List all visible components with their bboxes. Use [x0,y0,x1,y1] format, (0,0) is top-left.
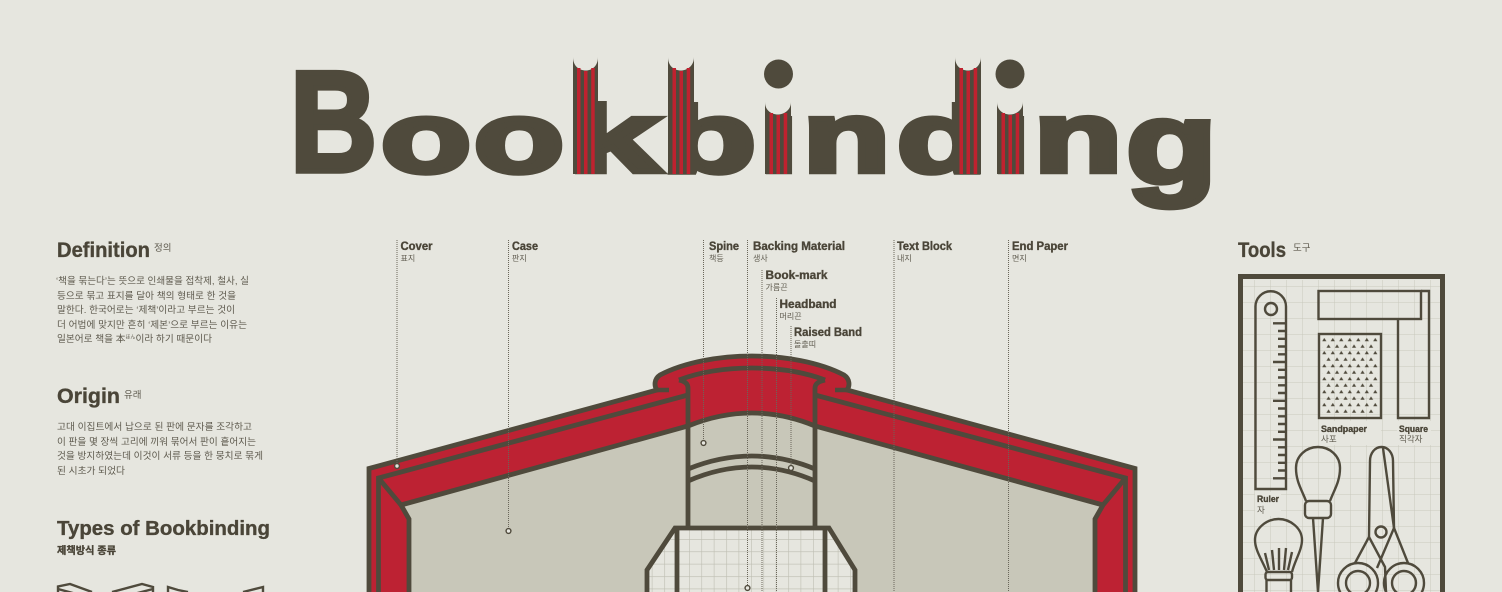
leader and label: text block: Text Block [897,239,952,253]
leader and label: end paper [1008,239,1068,592]
panel: tools [1238,239,1442,592]
origin text: 된 시초가 되었다 [57,465,125,477]
panel: definition [56,239,249,345]
leader and label: spine: 책등 [709,253,724,263]
origin text: 고대 이집트에서 납으로 된 판에 문자를 조각하고 [57,421,252,433]
definition text: ‘책을 묶는다’는 뜻으로 인쇄물을 접착제, 철사, 실 [56,275,249,287]
heading: Tools: Tools [1238,239,1286,262]
title text: i [760,82,798,194]
icon: brush [1255,519,1302,592]
heading korean: 유래 [124,390,141,401]
icon: binding type two [168,587,263,592]
definition text: 이라 하기 때문이다 [135,333,212,345]
label: square: Square [1399,424,1428,434]
leader and label: backing material: 생사 [753,253,768,263]
definition text: 더 어법에 맞지만 흔히 ‘제본’으로 부르는 이유는 [57,319,247,331]
leader and label: case: Case [512,239,538,253]
title text: B [290,43,377,202]
icon: scissors [1338,447,1424,592]
heading korean: 제책방식 종류 [57,544,116,557]
title text: b [662,82,756,194]
heading korean: 도구 [1293,243,1311,254]
leader and label: text block [894,239,952,592]
icon: binding type one [58,584,153,592]
leader and label: spine [701,239,739,445]
origin text: 이 판을 몇 장씩 고리에 끼워 묶어서 판이 흩어지는 [57,436,256,448]
leader and label: raised band: 돌출띠 [794,339,816,349]
leader and label: end paper: 면지 [1012,253,1027,263]
leader and label: backing material [745,239,845,590]
panel: origin [57,385,263,477]
leader and label: cover [395,239,433,468]
definition text: 말한다. 한국어로는 ‘제책’이라고 부르는 것이 [57,304,235,316]
label: square: 직각자 [1399,434,1423,444]
icon: sandpaper [1319,334,1381,418]
leader and label: book-mark [762,268,828,592]
leader and label: raised band: Raised Band [794,325,862,339]
leader and label: book-mark: 가름끈 [766,283,788,292]
leader and label: spine: Spine [709,239,739,253]
origin text [57,421,263,477]
heading: Origin: Origin [57,385,120,408]
label: ruler: 자 [1257,505,1265,515]
definition text: 일본어로 책을 本 [57,334,125,345]
leader and label: end paper: End Paper [1012,239,1068,253]
heading korean: 정의 [154,243,171,254]
leader and label: headband: Headband [780,297,836,311]
title text: g [1126,78,1217,208]
heading: Types of Bookbinding: Types of Bookbinding [57,518,270,540]
leader and label: case: 판지 [512,254,527,263]
leader and label: book-mark: Book-mark [766,268,828,282]
leader and label: cover: 표지 [400,254,415,263]
title text: o [474,82,564,194]
label: sandpaper: 사포 [1321,434,1337,444]
cover red shape [369,356,1135,592]
label: sandpaper [1319,421,1381,445]
label: ruler [1255,492,1281,516]
origin text: 것을 방지하였는데 이것이 서류 등을 한 뭉치로 묶게 [57,450,263,462]
label: ruler: Ruler [1257,494,1279,504]
leader and label: text block: 내지 [897,254,912,263]
text block with grid paper [647,528,855,592]
definition text: 등으로 묶고 표지를 달아 책의 형태로 한 것을 [57,290,236,302]
label: square [1397,421,1431,445]
definition text [56,275,249,345]
tools frame with grid [1240,276,1442,592]
title: Bookbinding [290,43,1217,208]
icon: square [1318,291,1429,418]
diagram: book cross-section [369,356,1135,592]
title bound stems [573,55,1028,174]
title text: d [897,82,986,194]
leader and label: raised band [789,325,862,470]
inner case grey panel [401,414,1103,592]
book outlines [369,356,1135,592]
title text: n [803,82,890,194]
leader and label: cover: Cover [400,239,433,253]
label: sandpaper: Sandpaper [1321,424,1367,434]
title text: i [992,82,1030,194]
title text: o [381,82,471,194]
icon: awl [1296,447,1340,592]
definition text: ほん [125,334,135,340]
panel: types of bookbinding [57,518,270,592]
title text: n [1034,82,1122,194]
leader and label: headband: 머리끈 [780,312,802,321]
leader and label: case [506,239,538,533]
title text: k [568,82,661,194]
leader and label: backing material: Backing Material [753,239,845,253]
leader and label: headband [776,297,836,592]
heading: Definition: Definition [57,239,150,262]
icon: ruler [1256,291,1286,489]
